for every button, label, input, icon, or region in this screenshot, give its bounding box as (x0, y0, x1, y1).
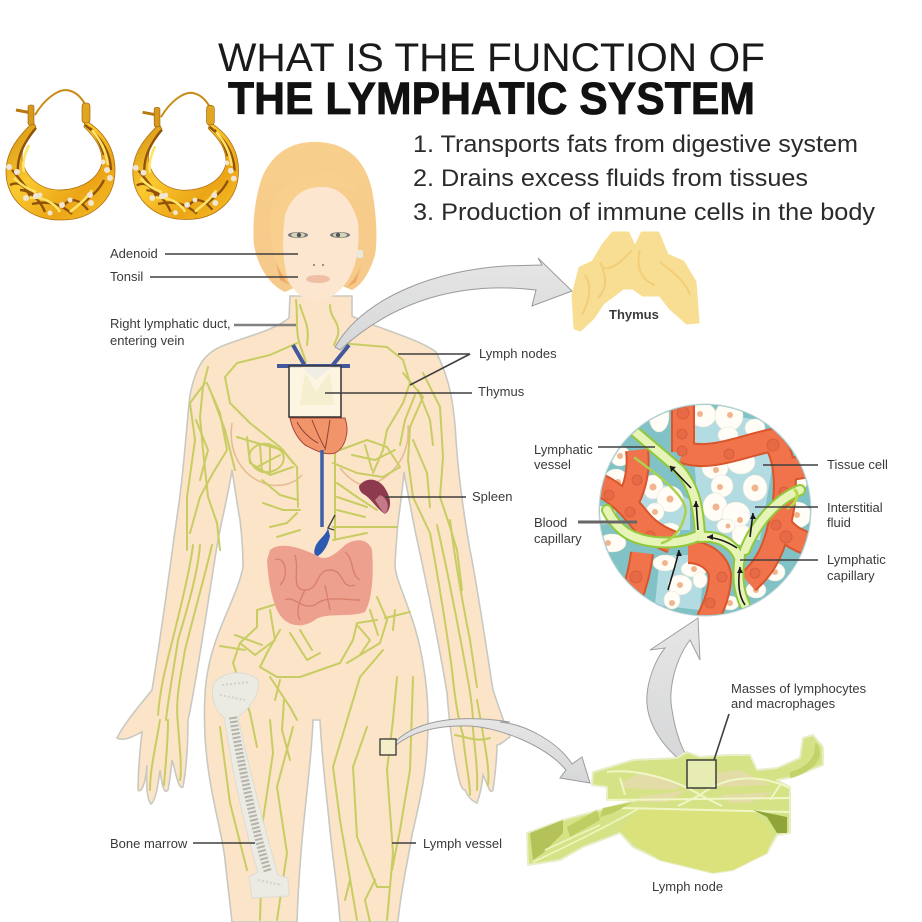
title (218, 36, 765, 124)
tissue labels: fluid (827, 515, 851, 530)
tissue labels: Lymphatic (827, 552, 886, 567)
magnified tissue circle (598, 404, 812, 616)
face (283, 187, 359, 302)
function list: 1. Transports fats from digestive system (413, 131, 858, 158)
function list (413, 131, 876, 226)
female body figure (117, 142, 510, 922)
interstitial fluid areas (640, 410, 775, 610)
body labels: Bone marrow (110, 836, 188, 851)
hair fringe (270, 172, 360, 280)
lymph node labels: and macrophages (731, 696, 836, 711)
tissue labels (534, 442, 888, 583)
title: THE LYMPHATIC SYSTEM (228, 73, 755, 124)
tissue labels: vessel (534, 457, 571, 472)
lymph node labels: Masses of lymphocytes (731, 681, 867, 696)
body labels: Tonsil (110, 269, 143, 284)
body labels: entering vein (110, 333, 184, 348)
thymus: Thymus (609, 307, 659, 322)
body silhouette (117, 296, 510, 922)
tissue labels: Blood (534, 515, 567, 530)
tissue labels: capillary (534, 531, 582, 546)
body labels: Spleen (472, 489, 512, 504)
bone marrow femur (212, 673, 289, 898)
blood capillaries (600, 406, 808, 615)
eyes, nose and lips (288, 232, 363, 283)
spleen (359, 480, 390, 514)
body labels: Lymph nodes (479, 346, 557, 361)
tissue cells (592, 400, 811, 610)
body labels (110, 246, 557, 851)
tissue labels: Lymphatic (534, 442, 593, 457)
body labels: Lymph vessel (423, 836, 502, 851)
body labels: Adenoid (110, 246, 158, 261)
arrow to tissue circle (647, 618, 700, 765)
lymph vessels network (150, 300, 490, 922)
tissue labels: Interstitial (827, 500, 883, 515)
flow arrows (668, 466, 756, 605)
right earring (133, 93, 239, 220)
title: WHAT IS THE FUNCTION OF (218, 36, 765, 80)
body labels: Thymus (478, 384, 525, 399)
lymph node inset box (687, 760, 716, 788)
intestines (267, 540, 373, 625)
left earring (6, 90, 115, 220)
lymph node labels (652, 681, 867, 894)
tissue labels: Tissue cell (827, 457, 888, 472)
thoracic duct blue vein and gallbladder (277, 345, 350, 556)
function list: 3. Production of immune cells in the body (413, 199, 876, 226)
thymus (573, 233, 698, 330)
arrow to thymus (335, 258, 572, 350)
lymph node (527, 735, 823, 873)
thymus highlight box (289, 366, 341, 417)
lymphatic vessels (607, 430, 800, 605)
heart (290, 418, 347, 454)
function list: 2. Drains excess fluids from tissues (413, 165, 808, 192)
lymph node labels: Lymph node (652, 879, 723, 894)
arrow to lymph node (396, 719, 590, 783)
tissue labels: capillary (827, 568, 875, 583)
hair back (253, 142, 376, 292)
breast outlines (231, 423, 408, 485)
body labels: Right lymphatic duct, (110, 316, 231, 331)
gold earrings photo (6, 90, 239, 220)
lymph vessel inset box (380, 739, 396, 755)
